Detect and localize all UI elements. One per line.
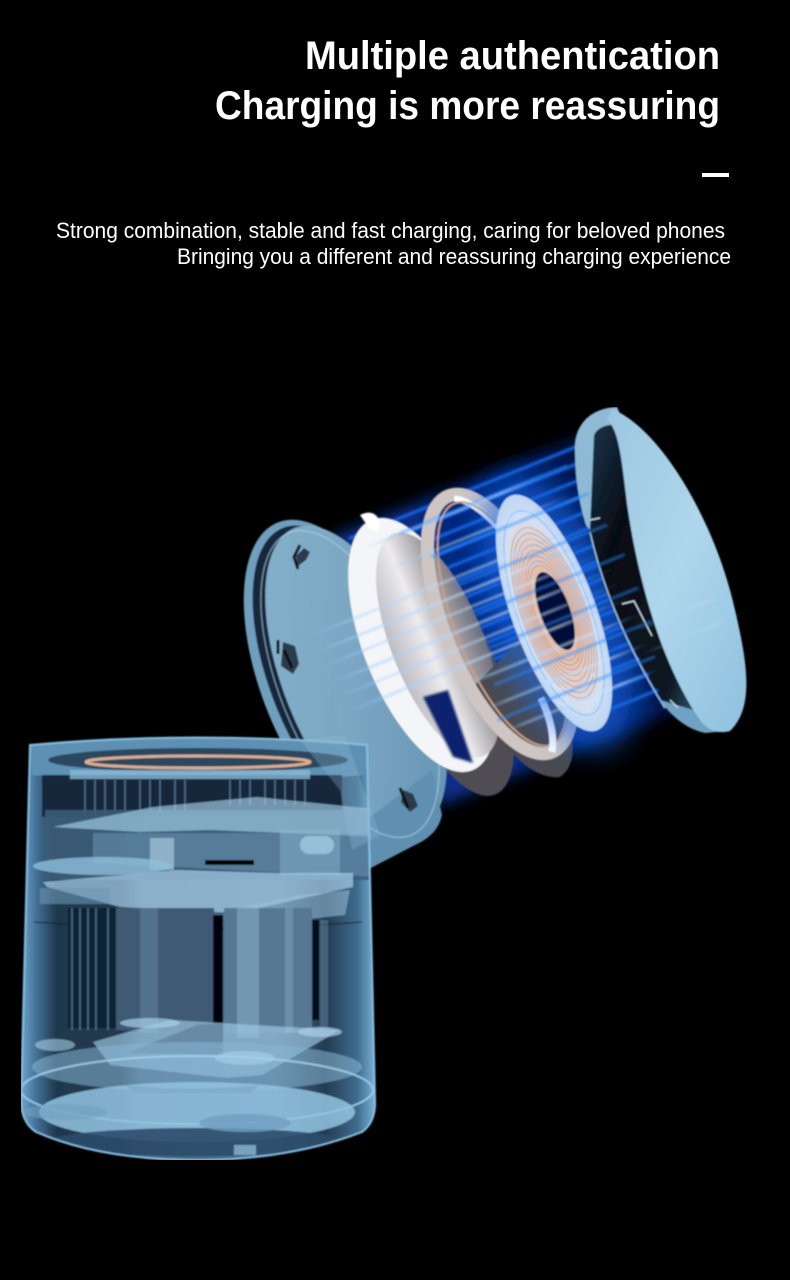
title: Multiple authentication [305,34,720,78]
upper circuit boards [33,797,383,928]
title: Charging is more reassuring [215,84,720,128]
subtitle text: Strong combination, stable and fast charging, caring for beloved phones [56,218,725,243]
top cap with copper coil [31,738,364,778]
ring 2 with copper edge and shadow [393,475,603,777]
ring 1 with grey plate and shadow [318,498,542,813]
subtitle text [56,218,731,269]
bright energy beams [280,424,753,789]
subtitle text: Bringing you a different and reassuring charging experience [177,244,731,269]
blue energy band behind parts [331,423,718,806]
left disc (cover plate) [203,493,484,871]
wireless charging coil [446,454,670,772]
product illustration: exploded wireless charging module [21,407,753,1160]
accent bar [702,173,729,177]
back disc (top cover) [575,407,746,733]
lower boards and base disc [21,1018,373,1156]
upper dark compartment with struts [42,770,342,817]
central battery columns [68,908,328,1038]
transparent charger base cup [21,735,383,1160]
title [215,34,720,128]
cover disc edge overlapping the cup [300,735,380,850]
